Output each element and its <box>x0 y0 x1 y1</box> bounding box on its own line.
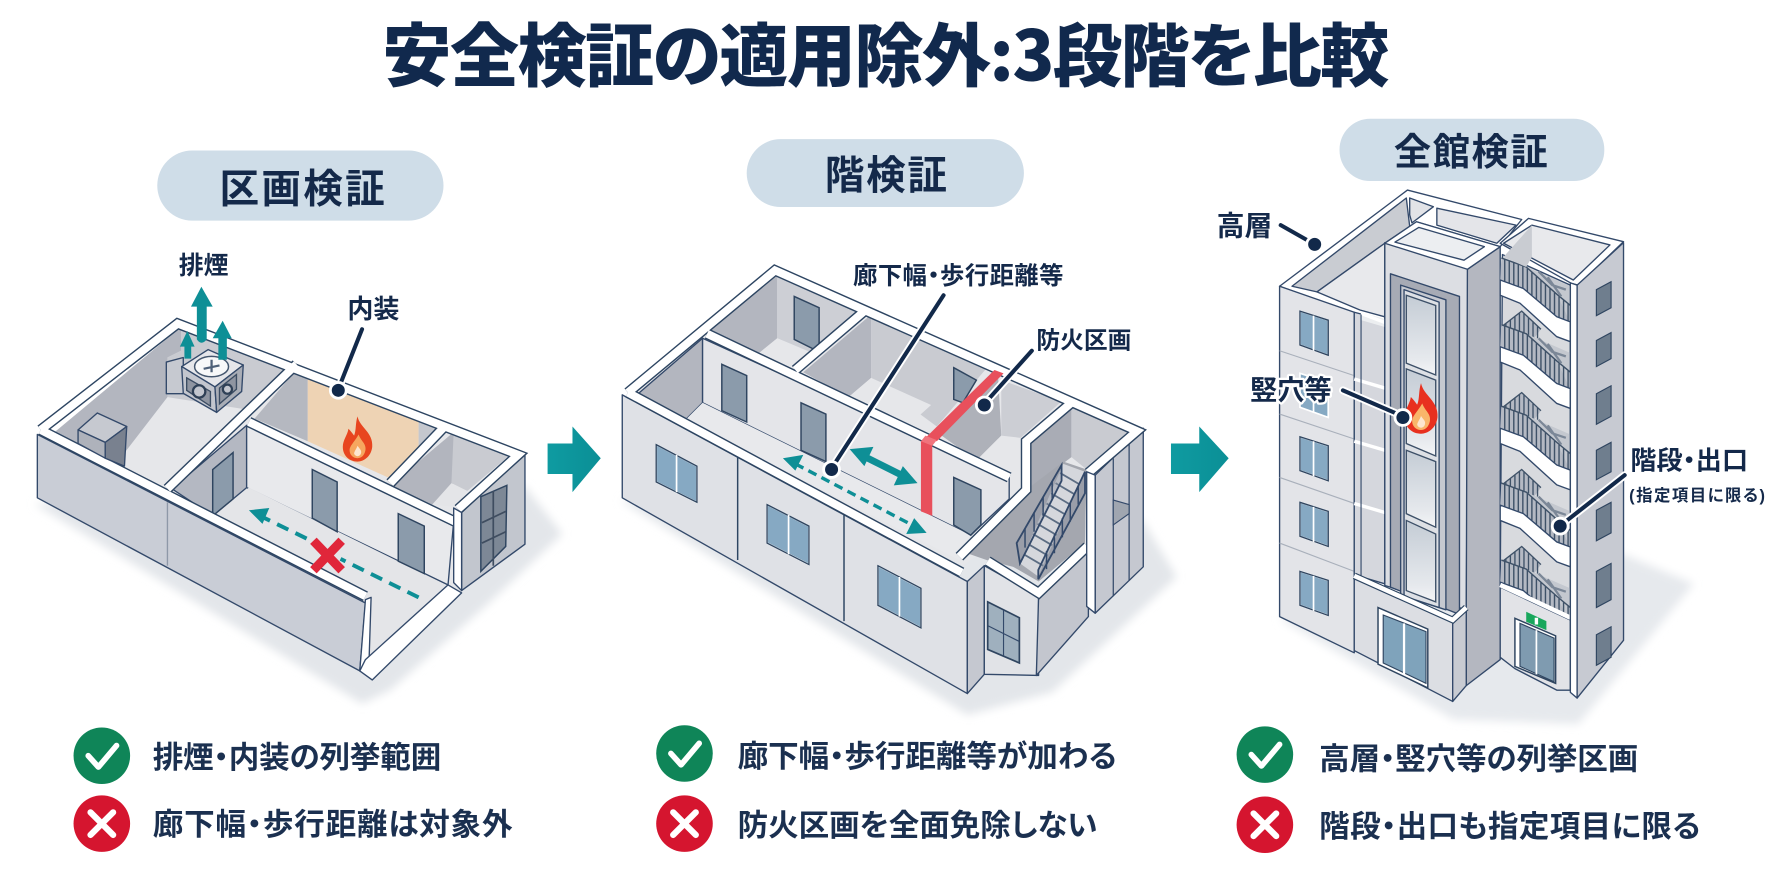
icon: cross <box>1237 796 1293 853</box>
panel: 全館検証 <box>1217 119 1765 853</box>
panel: 区画検証 <box>34 150 562 852</box>
arrow: 区画 to 階 <box>548 427 601 492</box>
exhaust arrows <box>180 287 232 360</box>
label: 廊下幅・歩行距離等 with leader: 廊下幅・歩行距離等 <box>853 263 1063 290</box>
open bays <box>1354 312 1385 584</box>
label: 防火区画 with leader: 防火区画 <box>1036 327 1131 354</box>
right windows <box>1596 282 1611 665</box>
label: 階段・出口 (指定項目に限る) with leader: (指定項目に限る) <box>1629 487 1765 505</box>
doors <box>722 296 981 535</box>
heading pill: 階検証 <box>747 139 1024 207</box>
cross text: 廊下幅・歩行距離は対象外 <box>153 808 513 842</box>
heading pill: 全館検証 <box>1340 119 1604 181</box>
flame in shaft <box>1405 383 1438 434</box>
isometric floor plan: compartment <box>34 287 562 704</box>
heading pill: 区画検証 <box>157 150 444 221</box>
corridor width arrow <box>850 447 918 485</box>
small equipment box <box>78 413 127 466</box>
wall tops <box>628 270 1137 593</box>
heading pill: 区画検証: 区画検証 <box>219 168 385 212</box>
roof <box>1280 190 1522 320</box>
left windows <box>1300 311 1328 615</box>
label: 内装 with leader <box>330 294 399 398</box>
walking distance arrow <box>783 455 927 534</box>
label: 竪穴等 with leader <box>1250 374 1411 425</box>
icon: cross <box>74 795 130 852</box>
label: 高層 with leader: 高層 <box>1217 210 1272 241</box>
icon: check <box>74 727 130 784</box>
icon: check <box>656 725 713 782</box>
icon: check <box>1237 726 1293 783</box>
label: 防火区画 with leader <box>976 327 1131 413</box>
checklist: 全館検証 <box>1237 726 1700 853</box>
cross text: 階段・出口も指定項目に限る <box>1319 810 1700 844</box>
fire compartment line <box>921 370 1004 516</box>
icon: cross <box>656 795 713 852</box>
stair section <box>1500 255 1570 690</box>
main entrance <box>1378 608 1428 688</box>
flame <box>343 416 372 462</box>
checklist: 区画検証 <box>74 727 513 852</box>
heading pill: 全館検証: 全館検証 <box>1394 131 1548 173</box>
tower <box>1354 222 1500 701</box>
arrow: 階 to 全館 <box>1171 427 1229 492</box>
shaft segments <box>1406 295 1436 602</box>
label: 排煙: 排煙 <box>179 252 229 280</box>
doors <box>213 453 424 574</box>
red cross <box>313 541 342 570</box>
smoke exhaust unit <box>166 350 243 412</box>
label: 竪穴等 with leader: 竪穴等 <box>1250 374 1332 405</box>
wall tops <box>41 324 518 596</box>
heading pill: 階検証: 階検証 <box>825 154 947 198</box>
label: 階段・出口 (指定項目に限る) with leader: 階段・出口 <box>1630 446 1748 476</box>
isometric building <box>1280 190 1694 724</box>
check text: 高層・竪穴等の列挙区画 <box>1319 742 1638 776</box>
stairwell <box>964 405 1130 582</box>
check text: 排煙・内装の列挙範囲 <box>153 741 441 775</box>
label: 廊下幅・歩行距離等 with leader <box>824 263 1063 477</box>
label: 内装 with leader: 内装 <box>347 294 399 324</box>
windows <box>656 445 921 628</box>
corridor route arrow, blocked <box>249 508 419 597</box>
interior finish wall <box>308 372 419 477</box>
checklist: 階検証 <box>656 725 1117 852</box>
label: 階段・出口 (指定項目に限る) with leader <box>1552 446 1765 534</box>
title: 安全検証の適用除外:3段階を比較 <box>382 0 1389 100</box>
exit door and green sign <box>1515 612 1556 683</box>
stair flights <box>1500 258 1570 644</box>
cross text: 防火区画を全面免除しない <box>738 809 1097 843</box>
label: 高層 with leader <box>1217 210 1323 252</box>
panel: 階検証 <box>620 139 1177 852</box>
check text: 廊下幅・歩行距離等が加わる <box>738 739 1117 774</box>
isometric floor plan: storey <box>620 269 1177 715</box>
